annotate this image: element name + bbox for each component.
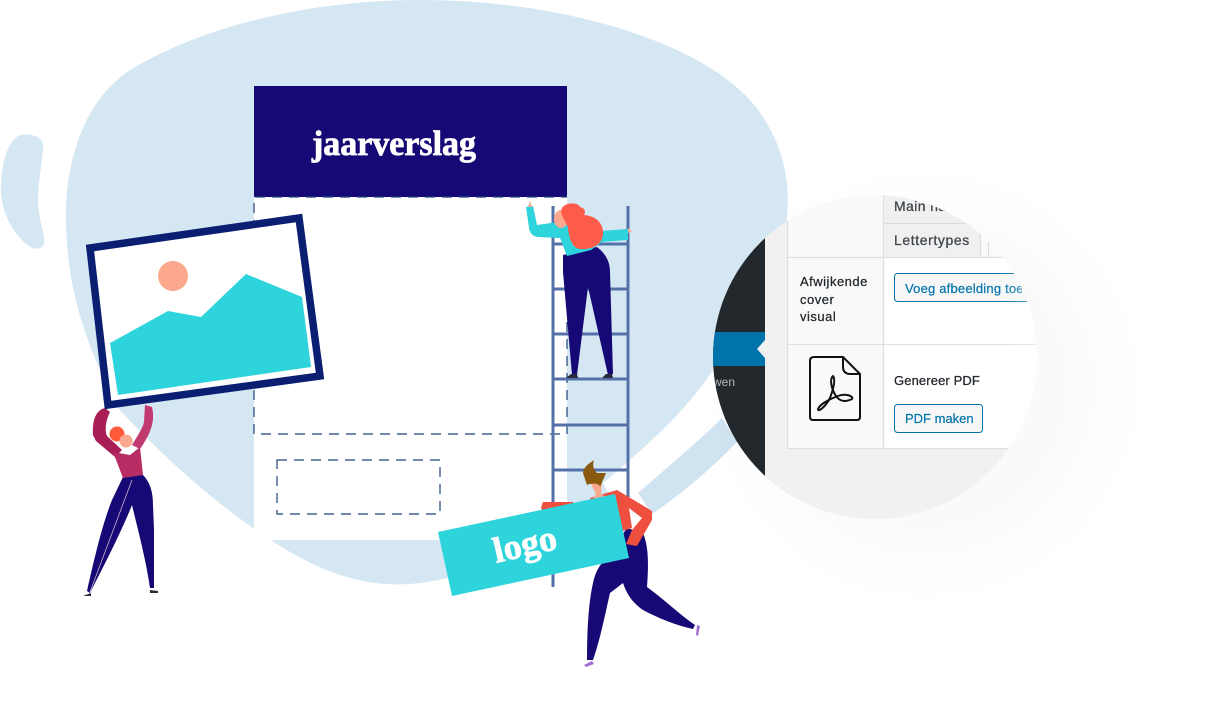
header band — [254, 86, 567, 197]
row label: visual — [800, 309, 836, 324]
background blob — [66, 0, 788, 584]
picture frame — [90, 218, 320, 405]
sidebar: wen — [712, 375, 735, 389]
logo card — [438, 494, 629, 596]
button: add image — [894, 274, 1044, 302]
settings table: Main nav — [894, 198, 954, 214]
row label: cover — [800, 292, 834, 307]
magnifier circle: admin screenshot — [700, 190, 1047, 525]
button: add image: Voeg afbeelding toe — [905, 281, 1024, 296]
person carrying logo — [438, 460, 700, 667]
sun — [158, 261, 188, 291]
icon: pdf — [810, 357, 860, 420]
button: pdf — [894, 404, 982, 432]
settings table — [787, 190, 1047, 448]
ladder — [553, 206, 628, 587]
lower blue band — [638, 418, 737, 514]
settings table: Lettertypes — [894, 232, 970, 248]
person holding picture — [83, 405, 158, 596]
button: pdf: PDF maken — [905, 411, 974, 426]
tabs — [884, 196, 965, 222]
logo text: logo — [489, 517, 560, 571]
title: jaarverslag: jaarverslag — [311, 124, 476, 163]
dashed cover placeholder — [254, 197, 567, 434]
settings table: Genereer PDF — [894, 373, 980, 388]
report page — [254, 86, 567, 540]
circle shadow — [700, 160, 1150, 610]
mountains — [110, 274, 311, 395]
small left blob — [1, 135, 44, 249]
dashed logo placeholder — [277, 460, 440, 514]
person on ladder — [526, 201, 632, 378]
sidebar — [713, 238, 765, 476]
row label: Afwijkende — [800, 274, 868, 289]
